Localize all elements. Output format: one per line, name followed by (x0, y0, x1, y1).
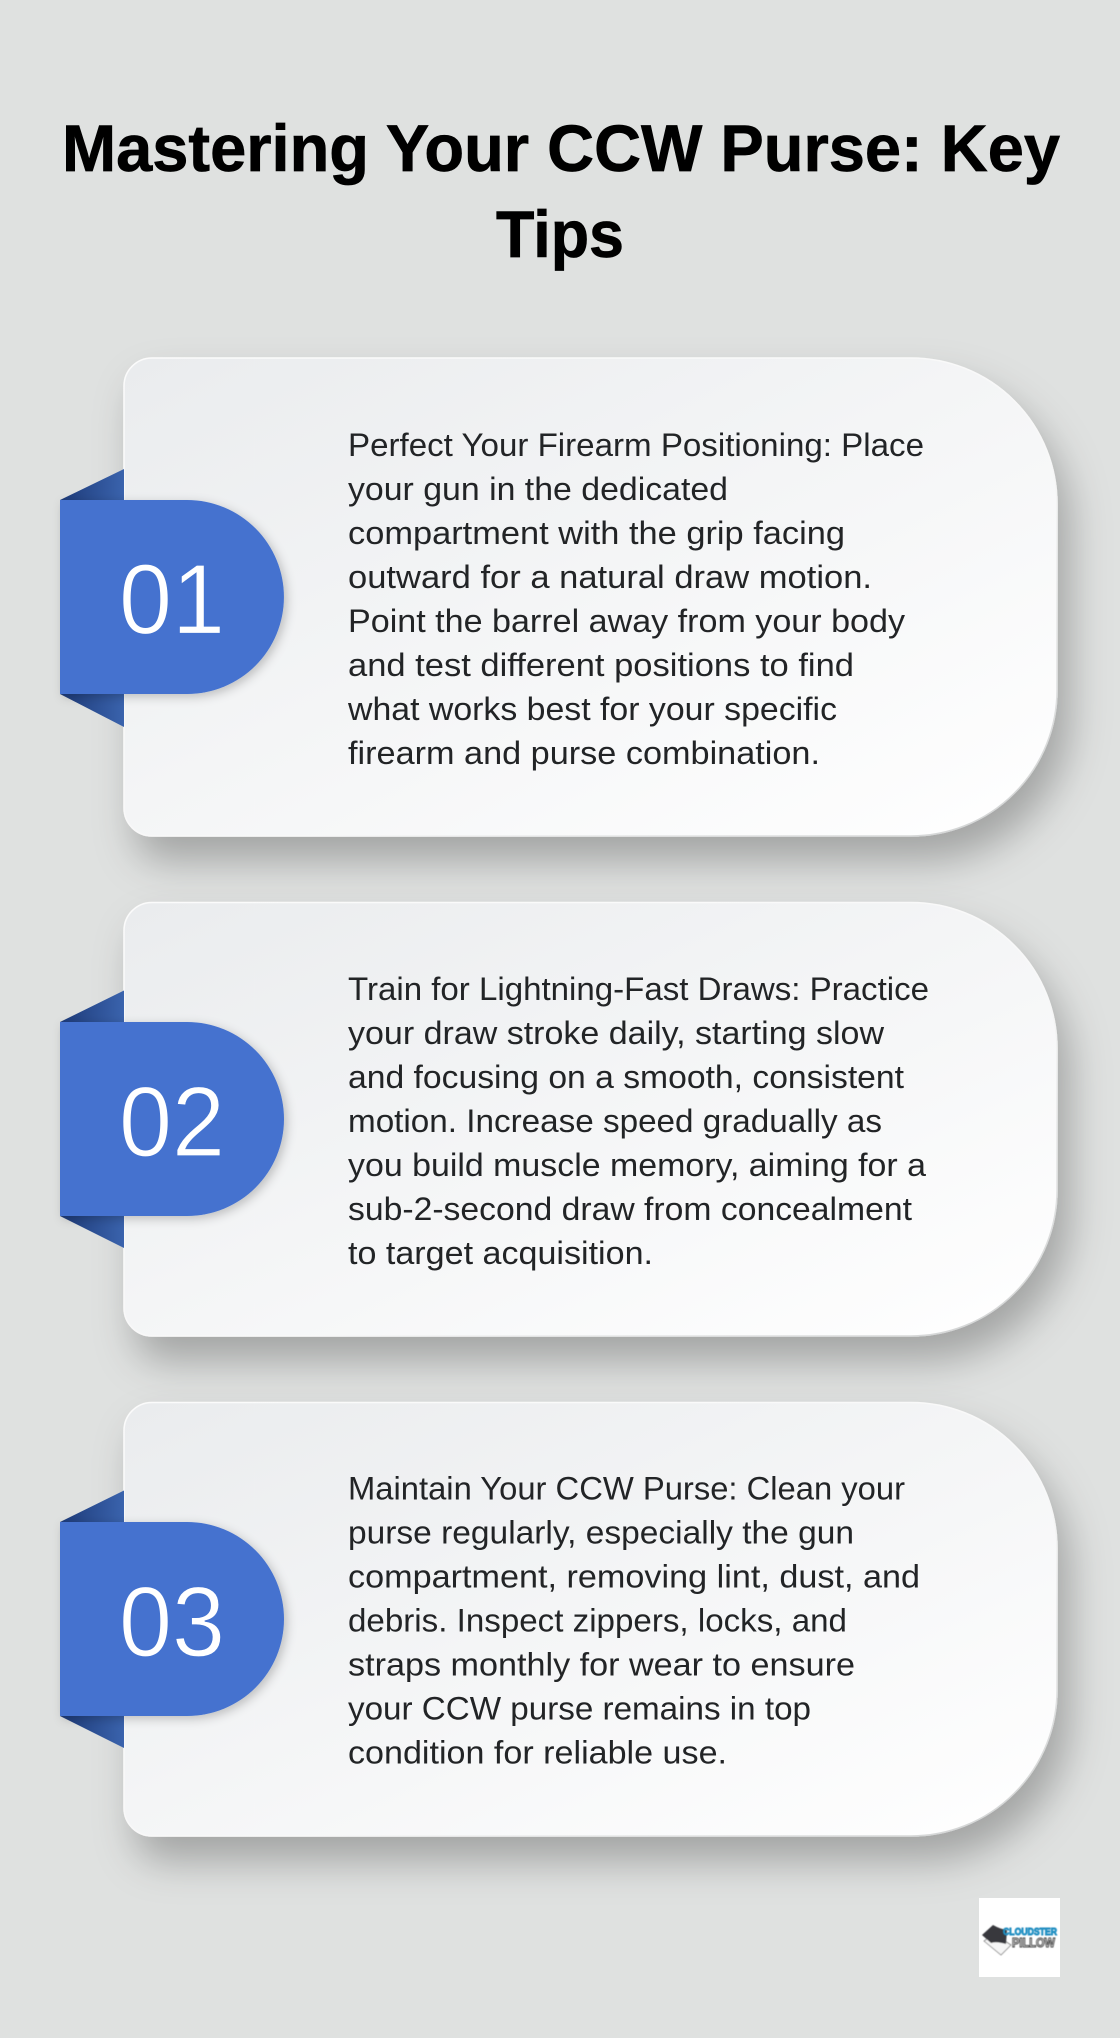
card 03 background (124, 1402, 1057, 1836)
title: Tips (496, 197, 624, 271)
tip 02 text (348, 971, 929, 1271)
logo background (979, 1898, 1060, 1977)
tip 02 text: to target acquisition. (348, 1235, 653, 1271)
number 02: 02 (119, 1066, 225, 1177)
title: Mastering Your CCW Purse: Key (62, 111, 1060, 185)
tip 01 text: compartment with the grip facing (348, 515, 845, 551)
tip 03 text: compartment, removing lint, dust, and (348, 1558, 920, 1594)
tip 03 text: your CCW purse remains in top (348, 1690, 811, 1726)
tip 02 text: you build muscle memory, aiming for a (348, 1147, 927, 1183)
tip 01 text: Point the barrel away from your body (348, 603, 906, 639)
tip 02 text: sub-2-second draw from concealment (348, 1191, 912, 1227)
tip 02 text: your draw stroke daily, starting slow (348, 1015, 885, 1051)
tip 01 text: Perfect Your Firearm Positioning: Place (348, 427, 924, 463)
logo: Cloudster Pillow (979, 1898, 1060, 1977)
tip 03 text: debris. Inspect zippers, locks, and (348, 1602, 847, 1638)
number badge 03 (60, 1522, 284, 1716)
tip 03 text: purse regularly, especially the gun (348, 1514, 854, 1550)
tip 01 text: outward for a natural draw motion. (348, 559, 872, 595)
number badge 02 (60, 1022, 284, 1216)
ribbon folds 01 (60, 469, 124, 727)
number 01: 01 (119, 544, 225, 654)
panel: tip 02 (60, 902, 1057, 1336)
tip 02 text: motion. Increase speed gradually as (348, 1103, 882, 1139)
panel: tip 03 (60, 1402, 1057, 1836)
tip 01 text: firearm and purse combination. (348, 735, 820, 771)
tip 01 text: your gun in the dedicated (348, 471, 728, 507)
card 02 background (124, 902, 1057, 1336)
logo wordmark: PILLOW (1012, 1935, 1056, 1950)
tip 03 text: Maintain Your CCW Purse: Clean your (348, 1470, 905, 1506)
tip 02 text: and focusing on a smooth, consistent (348, 1059, 904, 1095)
title (62, 111, 1060, 271)
tip 01 text (347, 427, 924, 771)
tip 03 text: condition for reliable use. (348, 1734, 727, 1770)
icon: pillow (982, 1925, 1011, 1955)
number badge 01 (60, 500, 284, 694)
panel: tip 01 (60, 358, 1057, 836)
ribbon folds 02 (60, 990, 124, 1248)
number 03: 03 (119, 1566, 225, 1677)
tip 01 text: and test different positions to find (348, 647, 854, 683)
tip 03 text (348, 1470, 920, 1770)
card 01 background (124, 358, 1057, 836)
tip 02 text: Train for Lightning-Fast Draws: Practice (348, 971, 929, 1007)
tip 03 text: straps monthly for wear to ensure (348, 1646, 855, 1682)
logo wordmark (1003, 1927, 1058, 1950)
tip 01 text: what works best for your specific (347, 691, 837, 727)
logo wordmark: CLOUDSTER (1003, 1927, 1058, 1938)
ribbon folds 03 (60, 1490, 124, 1748)
